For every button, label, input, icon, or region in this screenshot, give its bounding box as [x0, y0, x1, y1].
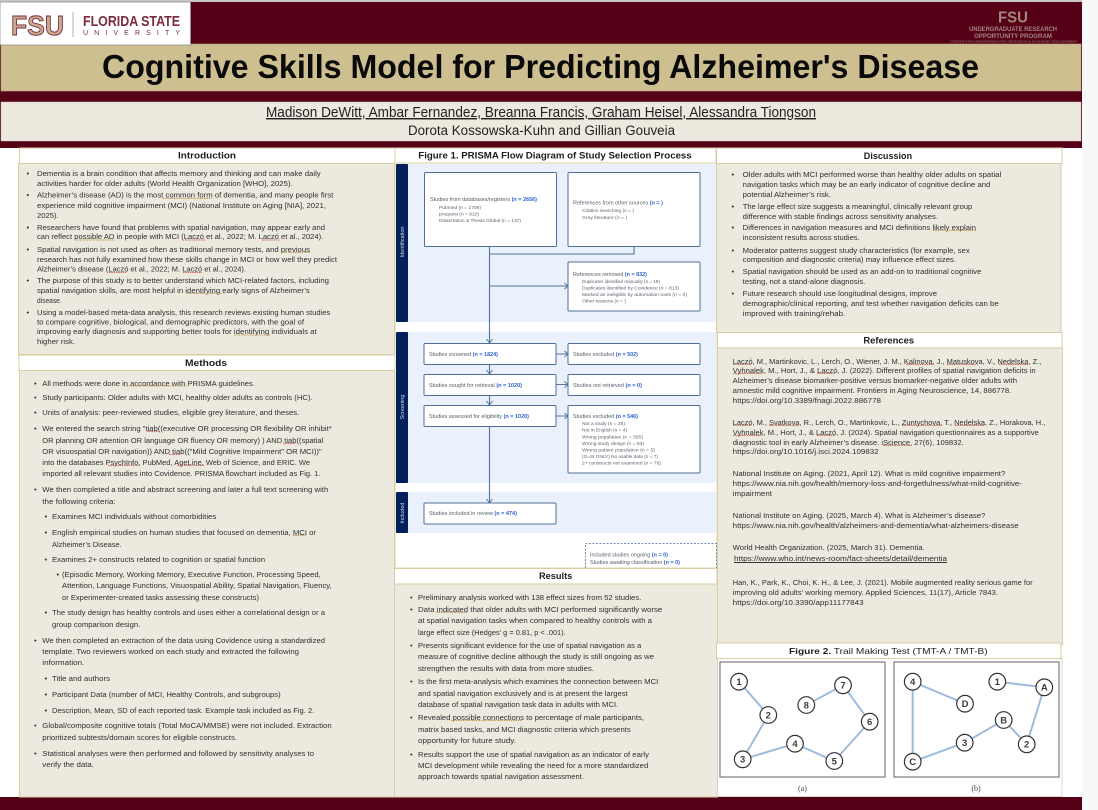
stage: identification: [396, 164, 716, 322]
heading: methods: [19, 355, 395, 370]
stage: identification: Identification: [400, 227, 406, 257]
text: reference list: Laczó, M., Martinkovic, L., Lerch, O., Wiener, J. M., Kalinova, J., Matuskova, V., Nedelska, Z.,: [733, 357, 1041, 366]
box: studies from databases: Dissertation & Thesis Global (n = 137): [439, 218, 521, 223]
text: results bullets: opportunity for future study.: [418, 736, 516, 745]
chart: TMT-A panel: 4: [792, 739, 798, 750]
text: reference list: National Institute on Aging. (2021, April 12). What is mild cognitive impairment?: [733, 469, 1005, 478]
text: discussion bullets: improved with training/rehab.: [743, 309, 845, 318]
UROP logo: OPPORTUNITY PROGRAM: [974, 33, 1052, 40]
text: methods bullets: Participant Data (number of MCI, Healthy Controls, and subgroups): [52, 690, 281, 699]
text: methods bullets: •: [34, 379, 37, 388]
text: results bullets: approach towards spatial navigation assessment.: [418, 772, 584, 781]
box: studies from databases: [424, 172, 556, 246]
FSU logo: FLORIDA STATE: [83, 14, 180, 30]
text: introduction bullets: Researchers have found that problems with spatial navigation, may appear early and: [37, 223, 325, 232]
text: discussion bullets: composition and diagnostic criteria) may influence effect sizes.: [743, 255, 956, 264]
text: methods bullets: The study design has healthy controls and uses either a correlational design or a: [52, 608, 326, 617]
text: results bullets: •: [410, 593, 413, 602]
box: studies excluded 546: Wrong study design (n = 83): [582, 441, 644, 446]
text: introduction bullets: Alzheimer’s disease (AD) is the most common form of dementia, and many people first: [37, 190, 334, 200]
text: reference list: https://www.nia.nih.gov/health/alzheimers-and-dementia/what-alzheimers-disease: [733, 521, 1019, 530]
box: studies included in review: Studies included in review (n = 474): [429, 511, 517, 517]
heading: figure 2: Figure 2. Trail Making Test (TMT-A / TMT-B): [789, 646, 988, 656]
text: results bullets: database of spatial navigation task data in adults with MCI.: [418, 700, 618, 709]
text: introduction bullets: [26, 169, 338, 346]
chart: TMT-B panel: 3: [962, 738, 967, 749]
text: reference list: [733, 357, 1045, 607]
text: methods bullets: •: [44, 690, 48, 699]
authors band: [1, 102, 1081, 141]
authors band: Madison DeWitt, Ambar Fernandez, Breanna Francis, Graham Heisel, Alessandra Tiongson: [266, 105, 816, 121]
chart: TMT-A panel: 8: [804, 700, 809, 711]
box: studies excluded 546: Not a study (n = 26): [582, 421, 625, 426]
text: discussion bullets: demographic/clinical reporting, and test whether navigation deficits can be: [743, 299, 999, 308]
text: methods bullets: All methods were done in accordance with PRISMA guidelines.: [42, 379, 255, 388]
text: discussion bullets: Older adults with MCI performed worse than healthy older adults on spatial: [743, 170, 1002, 179]
panel: figure 1 PRISMA flow diagram: [395, 148, 717, 568]
title banner: [1, 44, 1081, 91]
text: introduction bullets: activities harder for older adults (World Health Organization [WHO], 2025).: [37, 179, 293, 188]
footer band: [0, 797, 1082, 810]
text: methods bullets: •: [34, 393, 37, 402]
text: methods bullets: the following criteria:: [42, 497, 116, 506]
text: reference list: amnestic mild cognitive impairment. Frontiers in Aging Neuroscience, 14, 886778.: [733, 386, 1011, 395]
text: methods bullets: Examines 2+ constructs related to cognition or spatial function: [52, 555, 265, 564]
text: discussion bullets: Spatial navigation should be used as an add-on to traditional cognitive: [743, 267, 981, 276]
box: studies assessed for eligibility: [424, 406, 556, 426]
chart: TMT-A panel: [720, 662, 885, 793]
chart: TMT-A panel: 3: [740, 755, 745, 766]
text: introduction bullets: •: [26, 308, 30, 317]
text: methods bullets: prioritized subtests/domain scores for eligible constructs.: [42, 733, 237, 742]
box: studies excluded 502: Studies excluded (n = 502): [573, 352, 638, 358]
text: reference list: Vyhnalek, M., Hort, J., & Laczó, J. (2024). Spatial navigation questionnaires as a supportive: [733, 428, 1039, 437]
text: methods bullets: into the databases PsychInfo, PubMed, AgeLine, Web of Science, and ERIC. We: [42, 458, 310, 467]
chart: TMT-A panel: 5: [832, 756, 838, 767]
text: reference list: https://www.who.int/news-room/fact-sheets/detail/dementia: [734, 554, 948, 563]
text: methods bullets: Statistical analyses were then performed and followed by sensitivity analyses to: [42, 749, 314, 758]
text: results bullets: Preliminary analysis worked with 138 effect sizes from 52 studies.: [418, 593, 641, 602]
box: references removed: Duplicates identified by Covidence (n = 813): [582, 285, 680, 290]
text: introduction bullets: Dementia is a brain condition that affects memory and thinking and can make daily: [37, 169, 321, 178]
UROP logo: [950, 10, 1077, 44]
box: studies excluded 546: Studies excluded (n = 546): [573, 414, 638, 420]
text: methods bullets: Examines MCI individuals without comorbidities: [52, 512, 216, 521]
text: methods bullets: group comparison design.: [52, 620, 140, 629]
text: methods bullets: OR planning OR attention OR language OR fluency OR memory) ) AND tiab((spatial: [42, 436, 324, 445]
stage: included: [396, 492, 716, 533]
box: studies excluded 546: (G=SI ONLY) No usable data (n = 7): [582, 454, 658, 459]
text: results bullets: large effect size (Hedges’ g = 0.81, p < .001).: [418, 628, 566, 637]
text: methods bullets: Attention, Language Functions, Visuospatial Ability, Spatial Navigation, Fluency,: [62, 581, 332, 590]
box: studies not retrieved: Studies not retrieved (n = 0): [573, 383, 642, 389]
text: discussion bullets: •: [732, 246, 734, 255]
text: results bullets: MCI development while revealing the need for a more standardized: [418, 761, 648, 770]
text: results bullets: •: [410, 605, 413, 614]
chart: TMT-A panel: (a): [798, 784, 807, 793]
text: introduction bullets: to compare cognitive, biological, and demographic predictors, with the goal of: [37, 318, 305, 326]
text: methods bullets: •: [34, 636, 37, 645]
text: introduction bullets: Using a model-based meta-data analysis, this research reviews existing human studies: [37, 308, 330, 317]
panel: methods: [19, 355, 395, 797]
text: results bullets: •: [410, 677, 413, 686]
heading: references: [718, 332, 1062, 348]
text: methods bullets: [34, 379, 332, 769]
text: methods bullets: (Episodic Memory, Working Memory, Executive Function, Processing Speed,: [62, 570, 321, 579]
flow arrows: [486, 246, 634, 503]
chart: TMT-B panel: D: [962, 699, 969, 710]
text: introduction bullets: spatial navigation skills, are most helpful in identifying early signs of Alzheimer’s: [37, 286, 310, 295]
text: discussion bullets: potential Alzheimer’s risk.: [743, 190, 831, 199]
chart: TMT-B panel: 1: [995, 677, 1001, 688]
text: discussion bullets: •: [732, 202, 734, 211]
text: results bullets: at spatial navigation tasks when compared to healthy controls with a: [418, 616, 653, 625]
text: methods bullets: Global/composite cognitive totals (Total MoCA/MMSE) were not included. Extraction: [42, 721, 332, 730]
stage: included: Included: [400, 503, 406, 523]
text: results bullets: and spatial navigation exclusively and is at present the largest: [418, 689, 629, 698]
box: ongoing studies: Included studies ongoing (n = 0): [590, 552, 668, 558]
text: results bullets: •: [410, 641, 413, 650]
chart: TMT-B panel: A: [1041, 683, 1048, 694]
chart: TMT-B panel: [894, 662, 1059, 793]
heading: discussion: [716, 148, 1062, 164]
box: studies sought for retrieval: Studies sought for retrieval (n = 1020): [429, 383, 522, 389]
text: discussion bullets: difference with stable findings across sensitivity analyses.: [743, 212, 938, 221]
text: methods bullets: We then completed a title and abstract screening and later a full text screening with: [42, 485, 328, 494]
text: introduction bullets: •: [26, 169, 30, 178]
chart: TMT-A panel: 2: [766, 710, 771, 721]
heading: methods: Methods: [185, 358, 227, 368]
text: introduction bullets: Spatial navigation is not used as often as traditional memory tests, and previous: [37, 245, 310, 254]
text: results bullets: Revealed possible connections to percentage of male participants,: [418, 713, 644, 722]
authors band: Dorota Kossowska-Kuhn and Gillian Gouveia: [408, 123, 675, 138]
panel: figure 2 trail making test: [716, 643, 1062, 796]
text: reference list: https://doi.org/10.3390/app11177843: [733, 598, 864, 607]
chart: TMT-B panel: C: [909, 757, 916, 768]
chart: TMT-A panel: 7: [840, 681, 846, 692]
UROP logo: CENTER FOR UNDERGRADUATE RESEARCH & ACADEMIC ENGAGEMENT: [950, 40, 1077, 44]
box: studies screened: [424, 344, 556, 364]
box: references removed: Marked as ineligible by automation tools (n = 0): [582, 292, 687, 297]
text: discussion bullets: Differences in navigation measures and MCI definitions likely explain: [743, 223, 976, 232]
box: references from other sources: [568, 172, 700, 246]
text: discussion bullets: inconsistent results across studies.: [743, 233, 860, 242]
text: introduction bullets: can reflect possible AD in people with MCI (Laczó et al., 2022; M. Laczó et al., 2024).: [37, 232, 323, 241]
text: reference list: Laczó, M., Svatkova, R., Lerch, O., Martinkovic, L., Zuntychova, T., Nedelska, Z., Horakova, H.,: [733, 418, 1045, 427]
text: methods bullets: •: [44, 528, 48, 537]
text: methods bullets: verify the data.: [42, 760, 94, 769]
heading: figure 1: [395, 148, 716, 163]
text: results bullets: matrix based tasks, and MCI diagnostic criteria which presents: [418, 725, 631, 734]
text: methods bullets: We then completed an extraction of the data using Covidence using a standardized: [42, 636, 325, 645]
text: discussion bullets: testing, not a stand-alone diagnosis.: [743, 277, 865, 286]
box: references from other sources: Grey literature (n = ): [582, 215, 628, 220]
text: results bullets: measure of cognitive decline although the study is still ongoing as we: [418, 652, 654, 661]
text: discussion bullets: Future research should use longitudinal designs, improve: [743, 289, 937, 298]
text: reference list: impairment: [733, 489, 773, 498]
text: methods bullets: Title and authors: [52, 674, 110, 683]
text: methods bullets: •: [56, 570, 60, 579]
text: reference list: improving old adults’ working memory. Applied Sciences, 11(17), Article 7843.: [733, 588, 998, 597]
box: studies from databases: Studies from databases/registers (n = 2656): [430, 197, 537, 203]
UROP logo: UNDERGRADUATE RESEARCH: [969, 26, 1057, 33]
FSU logo: [0, 2, 190, 45]
box: studies excluded 546: [568, 406, 700, 473]
text: methods bullets: Alzheimer’s Disease.: [52, 540, 122, 549]
text: methods bullets: We entered the search string "tiab((executive OR processing OR flexibility OR inhibit*: [42, 424, 332, 433]
text: reference list: https://doi.org/10.1016/j.isci.2024.109832: [733, 447, 879, 456]
text: methods bullets: template. Two reviewers worked on each study and extracted the following: [42, 647, 299, 656]
text: introduction bullets: improving early diagnosis and supporting better tools for identifying individuals at: [37, 327, 318, 336]
text: discussion bullets: navigation tasks which may be an early indicator of cognitive decline and: [743, 180, 990, 189]
FSU logo: FSU: [11, 10, 64, 41]
text: introduction bullets: experience mild cognitive impairment (MCI) (National Institute on Aging [NIA], 2021,: [37, 201, 326, 210]
chart: TMT-B panel: 4: [910, 677, 916, 688]
text: introduction bullets: disease.: [37, 296, 62, 305]
text: reference list: Vyhnalek, M., Hort, J., & Laczó, J. (2022). Different profiles of spatial navigation deficits in: [733, 366, 1036, 375]
text: results bullets: Data indicated that older adults with MCI performed significantly worse: [418, 605, 662, 614]
text: results bullets: Presents significant evidence for the use of spatial navigation as a: [418, 641, 642, 650]
text: discussion bullets: •: [732, 170, 734, 179]
text: results bullets: [410, 593, 662, 781]
box: studies included in review: [424, 503, 556, 524]
text: methods bullets: •: [34, 485, 37, 494]
text: methods bullets: •: [34, 424, 37, 433]
box: references from other sources: Citation searching (n = ): [582, 208, 634, 213]
box: studies excluded 546: Wrong population (n = 355): [582, 434, 644, 439]
text: discussion bullets: [732, 170, 1002, 318]
text: introduction bullets: Alzheimer’s disease (Laczó et al., 2022; M. Laczó et al., 2024).: [37, 264, 246, 274]
chart: TMT-A panel: 6: [867, 717, 872, 728]
text: introduction bullets: •: [26, 245, 30, 254]
chart: TMT-B panel: 2: [1024, 740, 1029, 751]
box: studies excluded 546: 2+ constructs not examined (n = 76): [582, 460, 661, 465]
heading: references: References: [863, 336, 914, 346]
text: methods bullets: •: [44, 674, 48, 683]
heading: results: [394, 568, 717, 584]
text: methods bullets: imported all relevant studies into Covidence. PRISMA flowchart included as Fig. 1.: [42, 469, 321, 478]
text: reference list: https://doi.org/10.3389/fnagi.2022.886778: [733, 396, 881, 405]
text: results bullets: Results support the use of spatial navigation as an indicator of early: [418, 750, 649, 759]
text: reference list: https://www.nia.nih.gov/health/memory-loss-and-forgetfulness/what-mild-cognitive-: [733, 479, 1022, 488]
box: studies from databases: proquest (n = 810): [439, 212, 479, 216]
text: reference list: National Institute on Aging. (2025, March 4). What is Alzheimer’s disease?: [733, 511, 985, 520]
box: studies assessed for eligibility: Studies assessed for eligibility (n = 1020): [429, 414, 529, 420]
panel: references: [718, 332, 1062, 645]
text: results bullets: Is the first meta-analysis which examines the connection between MCI: [418, 677, 658, 686]
text: methods bullets: •: [44, 608, 48, 617]
heading: introduction: Introduction: [178, 150, 236, 160]
title banner: Cognitive Skills Model for Predicting Alzheimer's Disease: [102, 48, 979, 85]
box: ongoing studies: Studies awaiting classification (n = 0): [590, 560, 680, 566]
text: methods bullets: •: [34, 408, 37, 417]
text: discussion bullets: •: [732, 289, 734, 298]
heading: figure 2: [716, 643, 1061, 658]
box: studies excluded 502: [568, 344, 700, 364]
text: methods bullets: •: [44, 706, 48, 715]
heading: discussion: Discussion: [864, 151, 912, 161]
box: ongoing studies: [586, 544, 716, 568]
stage: screening: [396, 332, 716, 483]
text: methods bullets: OR visuospatial OR navigation)) AND tiab(("Mild Cognitive Impairment" OR MCI))": [42, 447, 322, 456]
text: results bullets: strengthen the results with data from more studies.: [418, 664, 594, 673]
text: introduction bullets: research has not fully examined how these skills change in MCI or how well they predict: [37, 255, 338, 264]
heading: introduction: [20, 148, 396, 164]
text: introduction bullets: •: [26, 276, 30, 285]
box: references from other sources: References from other sources (n = ): [573, 200, 663, 206]
box: studies sought for retrieval: [424, 374, 556, 396]
panel: discussion: [716, 148, 1062, 332]
text: discussion bullets: •: [732, 223, 734, 232]
heading: results: Results: [539, 571, 572, 581]
text: reference list: World Health Organization. (2025, March 31). Dementia.: [733, 543, 925, 552]
text: reference list: Alzheimer’s disease biomarker-positive versus biomarker-negative older adults with: [733, 376, 1017, 385]
heading: figure 1: Figure 1. PRISMA Flow Diagram of Study Selection Process: [418, 150, 692, 160]
text: discussion bullets: The large effect size suggests a meaningful, clinically relevant group: [743, 202, 972, 211]
text: introduction bullets: higher risk.: [37, 337, 75, 346]
text: introduction bullets: •: [26, 190, 30, 200]
text: methods bullets: or Experimenter-created tasks assessing these constructs): [62, 593, 259, 602]
text: introduction bullets: The purpose of this study is to better understand which MCI-related factors, including: [37, 276, 329, 285]
text: methods bullets: Description, Mean, SD of each reported task. Example task included as Fig. 2.: [52, 706, 314, 715]
chart: TMT-B panel: (b): [971, 784, 981, 793]
text: reference list: Han, K., Park, K., Choi, K. H., & Lee, J. (2021). Mobile augmented reality serious game for: [733, 578, 1033, 587]
box: references removed: References removed (n = 832): [573, 272, 647, 278]
stage: screening: Screening: [400, 395, 406, 419]
chart: TMT-A panel: 1: [736, 677, 742, 688]
box: studies excluded 546: Not in English (n = 4): [582, 428, 627, 433]
text: results bullets: •: [410, 713, 413, 722]
box: studies screened: Studies screened (n = 1824): [429, 352, 498, 358]
text: discussion bullets: Moderator patterns suggest study characteristics (for example, sex: [743, 246, 970, 255]
box: studies not retrieved: [568, 374, 700, 396]
panel: introduction: [18, 148, 396, 354]
text: methods bullets: •: [34, 749, 37, 758]
text: introduction bullets: 2025).: [37, 211, 59, 220]
box: references removed: Duplicates identified manually (n = 19): [582, 279, 660, 284]
text: discussion bullets: •: [732, 267, 734, 276]
text: methods bullets: Study participants: Older adults with MCI, healthy older adults as controls (HC).: [42, 393, 313, 402]
text: results bullets: •: [410, 750, 413, 759]
box: studies from databases: Pubmed (n = 1709): [439, 205, 481, 210]
text: methods bullets: English empirical studies on human studies that focused on dementia, MCI or: [52, 528, 316, 537]
panel: results: [394, 568, 718, 797]
box: references removed: Other reasons (n = ): [582, 298, 627, 303]
text: methods bullets: information.: [42, 658, 84, 667]
text: methods bullets: Units of analysis: peer-reviewed studies, eligible grey literature, and theses.: [42, 408, 299, 417]
text: methods bullets: •: [44, 555, 48, 564]
FSU logo: UNIVERSITY: [83, 30, 180, 37]
text: introduction bullets: •: [26, 223, 30, 232]
header band: [0, 2, 1082, 148]
UROP logo: FSU: [998, 10, 1028, 26]
box: studies excluded 546: Wrong patient population (n = 5): [582, 447, 656, 452]
text: reference list: diagnostic tool in early Alzheimer’s disease. iScience, 27(6), 109832.: [733, 438, 964, 447]
box: references removed: [568, 262, 700, 311]
text: methods bullets: •: [34, 721, 37, 730]
text: methods bullets: •: [44, 512, 48, 521]
chart: TMT-B panel: B: [1000, 715, 1007, 726]
